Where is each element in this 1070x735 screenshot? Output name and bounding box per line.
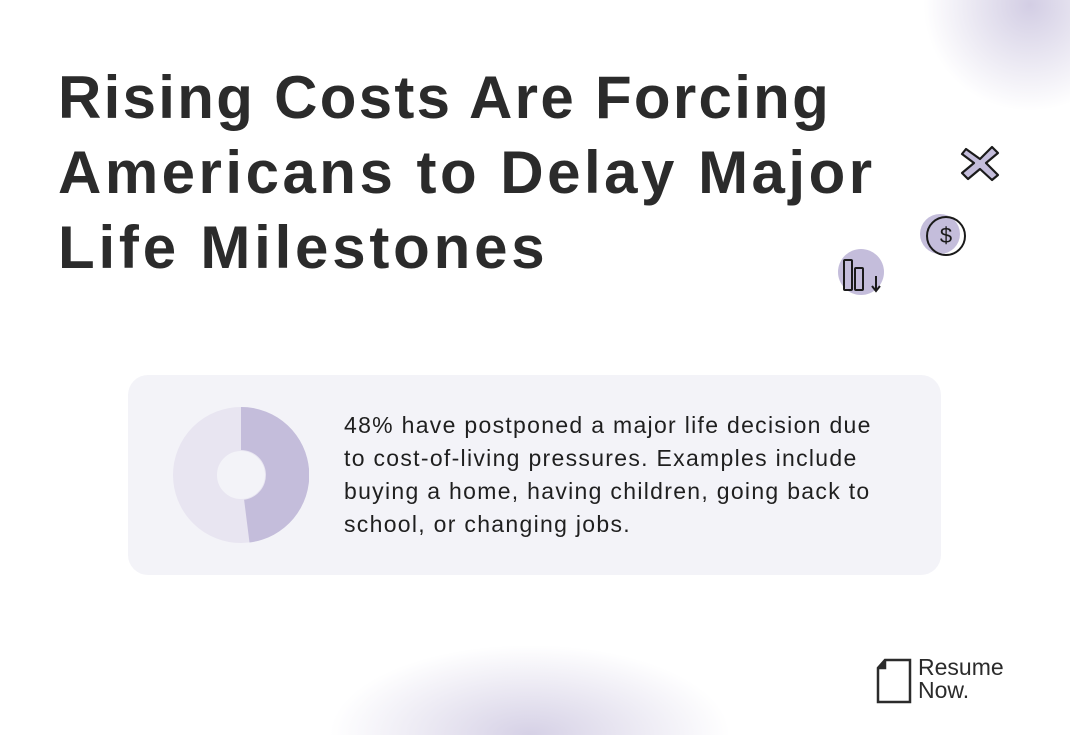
decorative glow bottom	[330, 640, 730, 735]
title: Life Milestones	[58, 214, 548, 281]
logo: Resume Now	[876, 654, 1004, 704]
panel: statistic	[128, 375, 941, 575]
donut chart 48%	[173, 407, 309, 543]
decorative glow top right	[920, 0, 1070, 110]
stat text: 48% have postponed a major life decision due	[344, 412, 872, 438]
logo: Resume Now: Resume	[918, 654, 1004, 680]
stat text: to cost-of-living pressures. Examples include	[344, 445, 858, 471]
stat text: buying a home, having children, going back to	[344, 478, 870, 504]
icon: x mark	[960, 146, 1000, 182]
icon: dollar coin: $	[940, 223, 952, 248]
stat text	[344, 412, 872, 537]
icon: dollar coin	[920, 214, 966, 256]
title: Rising Costs Are Forcing	[58, 64, 831, 131]
logo: Resume Now: Now.	[918, 677, 969, 703]
icon: declining bars	[838, 249, 884, 295]
title	[58, 64, 876, 281]
stat text: school, or changing jobs.	[344, 511, 631, 537]
title: Americans to Delay Major	[58, 139, 876, 206]
